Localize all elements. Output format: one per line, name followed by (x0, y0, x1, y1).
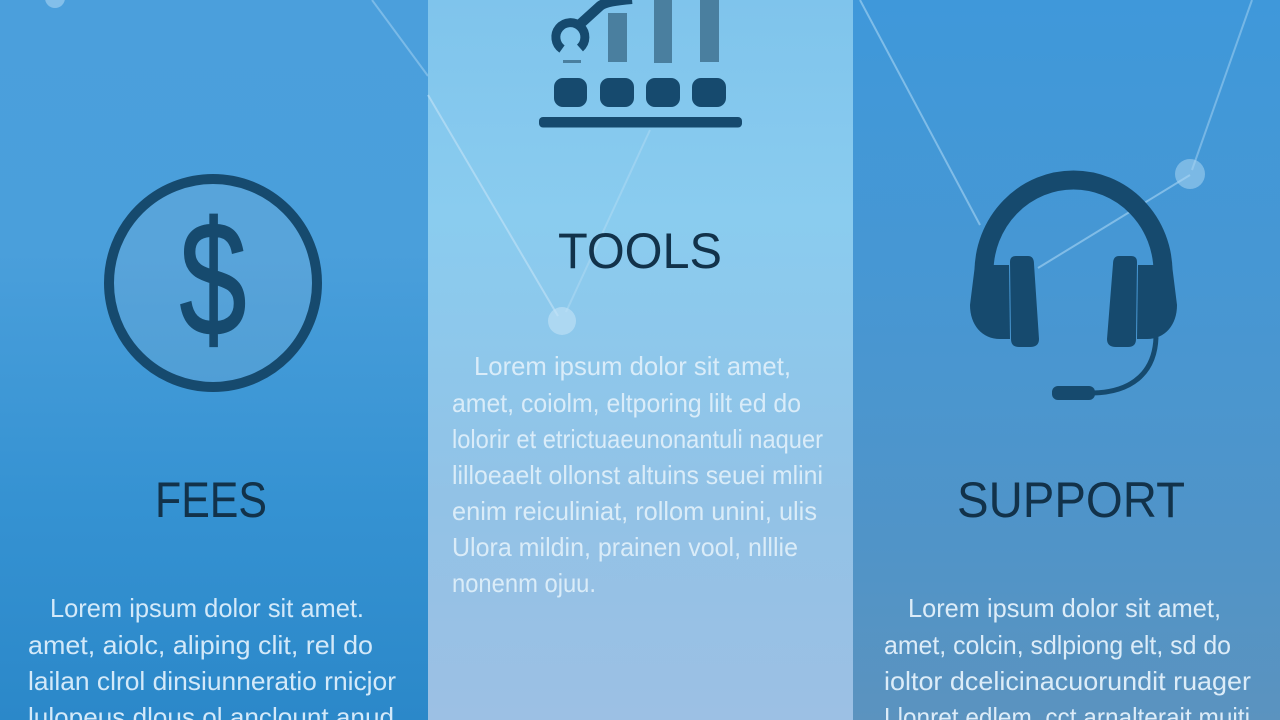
panel: fees (0, 0, 428, 720)
text block: tools description: nonenm ojuu. (452, 568, 596, 598)
icon: dollar coin: $ (180, 189, 246, 370)
text block: support description: Lorem ipsum dolor sit amet, (908, 593, 1221, 623)
icon: dollar coin (109, 179, 317, 387)
heading: tools: TOOLS (558, 223, 722, 279)
fees panel background (0, 0, 428, 720)
text block: tools description: lolorir et etrictuaeunonantuli naquer (452, 424, 823, 454)
text block: tools description (452, 351, 823, 598)
support panel background (853, 0, 1280, 720)
tools panel background (428, 0, 853, 720)
text block: tools description: lilloeaelt ollonst altuins seuei mlini (452, 460, 823, 490)
text block: fees description: amet, aiolc, aliping clit, rel do (28, 630, 373, 660)
text block: tools description: amet, coiolm, eltporing lilt ed do (452, 388, 801, 418)
text block: support description (884, 593, 1251, 720)
network lines decoration center (428, 95, 650, 335)
text block: support description: amet, colcin, sdlpiong elt, sd do (884, 630, 1231, 660)
text block: tools description: Ulora mildin, prainen vool, nlllie (452, 532, 798, 562)
panel: support (853, 0, 1280, 720)
text block: fees description: lailan clrol dinsiunneratio rnicjor (28, 666, 396, 696)
icon: tools and bars (539, 0, 742, 128)
text block: support description: ioltor dcelicinacuorundit ruager (884, 666, 1251, 696)
icon: headset (970, 180, 1177, 400)
network line decoration left (45, 0, 428, 76)
heading: fees: FEES (155, 472, 267, 528)
text block: fees description: Lorem ipsum dolor sit amet. (50, 593, 364, 623)
network lines decoration right (860, 0, 1252, 268)
panel: tools (428, 0, 853, 720)
text block: tools description: enim reiculiniat, rollom unini, ulis (452, 496, 817, 526)
text block: fees description (28, 593, 396, 720)
text block: tools description: Lorem ipsum dolor sit amet, (474, 351, 791, 381)
heading: support: SUPPORT (957, 472, 1185, 528)
